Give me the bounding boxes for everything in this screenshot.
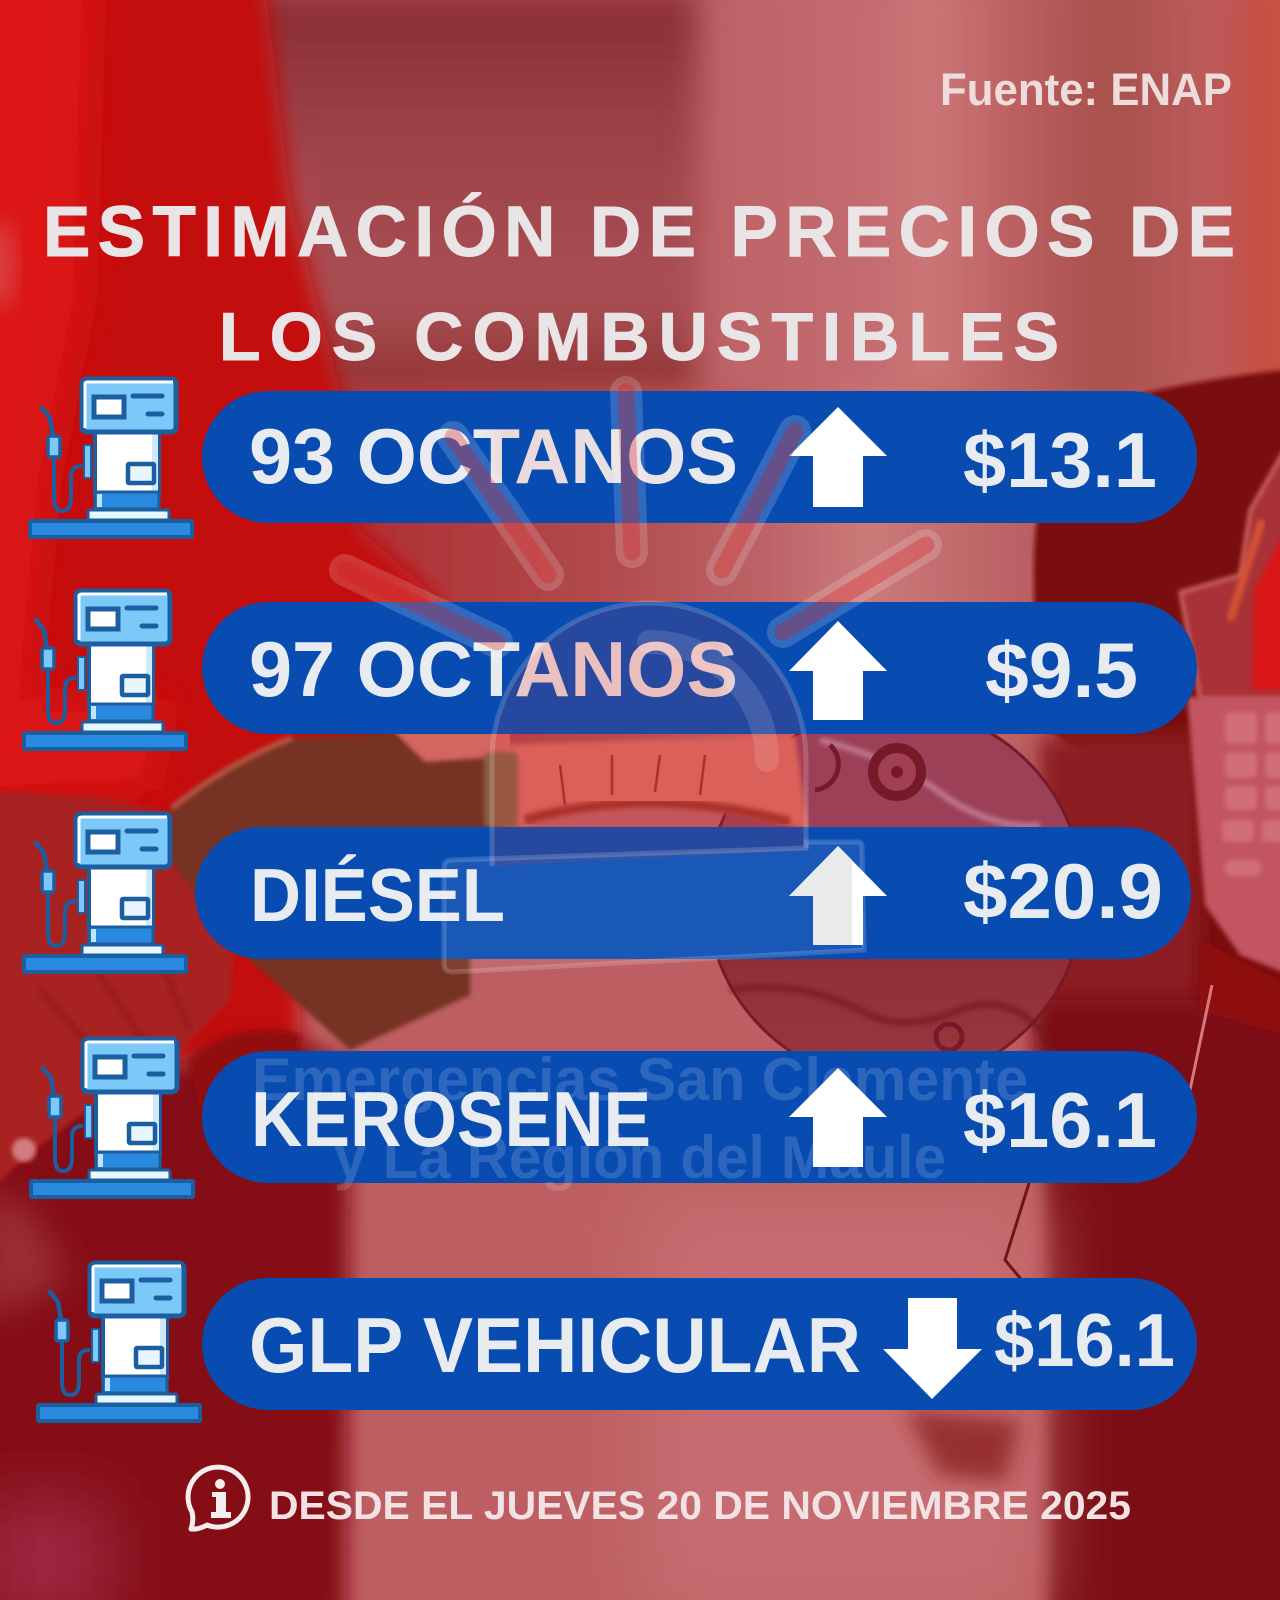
label: 93 OCTANOS <box>249 412 738 500</box>
label: 97 OCTANOS <box>249 625 738 713</box>
price row: 97 octanos <box>24 591 1197 749</box>
title: LOS COMBUSTIBLES <box>219 299 1059 375</box>
fuel pump icon <box>24 814 186 972</box>
pill <box>202 1278 1197 1410</box>
fuel pump icon <box>24 591 186 749</box>
nozzle and hose <box>395 734 510 770</box>
pill <box>202 602 1197 734</box>
up arrow <box>789 846 887 945</box>
price: $16.1 <box>994 1298 1175 1382</box>
watermark logo: rays, arch and organisation name <box>252 392 1028 1191</box>
pill <box>195 827 1191 959</box>
price row: 93 octanos <box>30 379 1197 537</box>
source credit: Fuente: ENAP <box>940 64 1232 115</box>
label: GLP VEHICULAR <box>249 1301 861 1389</box>
car body and tail light <box>1034 368 1280 1010</box>
arch <box>492 603 806 866</box>
up arrow <box>789 621 887 720</box>
fuel pump icon <box>30 379 192 537</box>
label: KEROSENE <box>251 1075 651 1163</box>
price: $16.1 <box>963 1076 1157 1164</box>
label: DIÉSEL <box>250 853 505 937</box>
price: $13.1 <box>963 416 1157 504</box>
price row: kerosene <box>31 1039 1197 1197</box>
icon: info speech bubble <box>188 1467 248 1529</box>
price row: diesel <box>24 814 1191 972</box>
watermark text: Emergencias San Clemente <box>252 1046 1028 1113</box>
price row: glp vehicular <box>38 1263 1197 1421</box>
footer date: DESDE EL JUEVES 20 DE NOVIEMBRE 2025 <box>269 1484 1131 1528</box>
fuel pump icon <box>38 1263 200 1421</box>
pill <box>202 391 1197 523</box>
title: ESTIMACIÓN DE PRECIOS DE <box>43 193 1235 272</box>
title <box>43 193 1235 375</box>
up arrow <box>789 1068 887 1167</box>
watermark text <box>252 1046 1028 1191</box>
hand and sleeve <box>0 1040 350 1600</box>
up arrow <box>789 407 887 507</box>
down arrow <box>883 1298 982 1399</box>
price: $9.5 <box>985 626 1138 714</box>
fuel pump icon <box>31 1039 193 1197</box>
price: $20.9 <box>963 847 1163 935</box>
fuel door <box>707 707 1083 1083</box>
greyed arrow portion under box <box>789 846 852 945</box>
pill <box>202 1051 1197 1183</box>
watermark text: y La Región del Maule <box>334 1124 946 1191</box>
lower body pink zone <box>350 1065 1040 1600</box>
base box <box>444 842 864 972</box>
